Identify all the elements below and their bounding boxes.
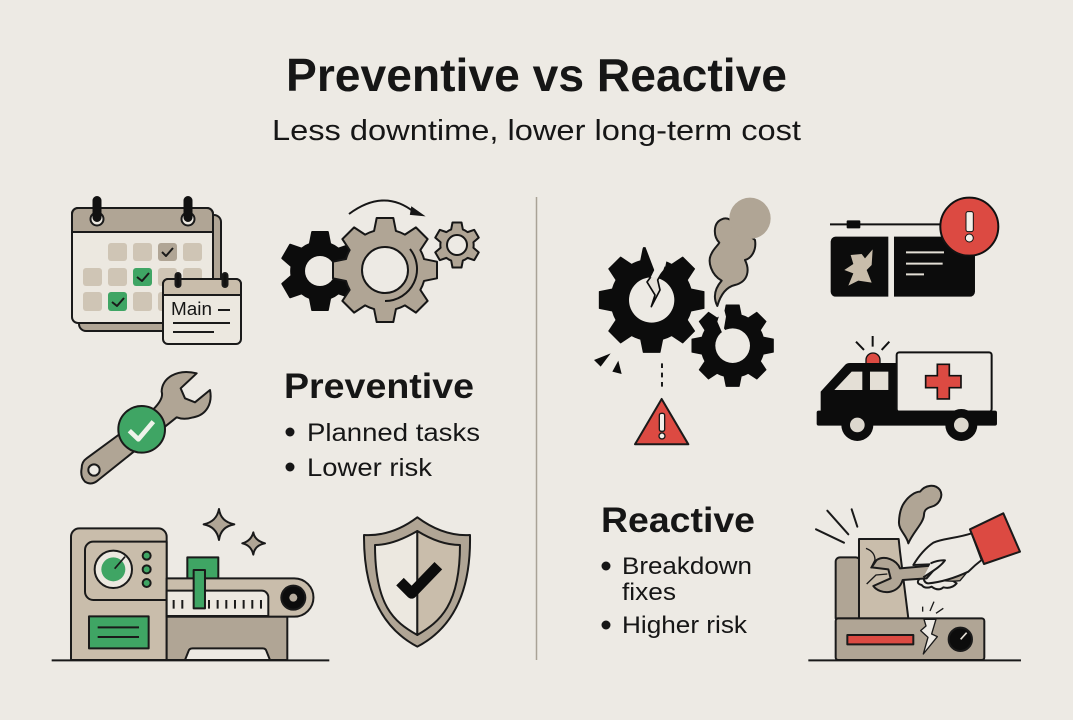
icon: calendar [72, 197, 241, 344]
calendar label: Main [171, 298, 212, 319]
list: reactive points: Breakdown [622, 553, 752, 580]
list: reactive points: fixes [622, 579, 676, 606]
list: reactive points [602, 553, 752, 639]
list: preventive points: Lower risk [307, 454, 433, 482]
title: Preventive vs Reactive [286, 49, 787, 101]
icon: wrench with check [81, 372, 211, 483]
heading: reactive: Reactive [601, 501, 755, 540]
divider [536, 197, 538, 660]
list: preventive points [286, 419, 480, 482]
icon: failed control panel with alert [830, 198, 998, 297]
subtitle: Less downtime, lower long-term cost [272, 115, 801, 147]
icon: ambulance [817, 336, 997, 441]
icon: shield with check [364, 517, 470, 647]
icon: conveyor machine [52, 509, 329, 660]
icon: broken gears with smoke [594, 198, 773, 444]
list: preventive points: Planned tasks [307, 419, 480, 447]
icon: hand repairing broken machine [808, 486, 1021, 660]
icon: meshing gears [282, 200, 479, 322]
heading: preventive: Preventive [284, 367, 474, 406]
list: reactive points: Higher risk [622, 612, 748, 639]
